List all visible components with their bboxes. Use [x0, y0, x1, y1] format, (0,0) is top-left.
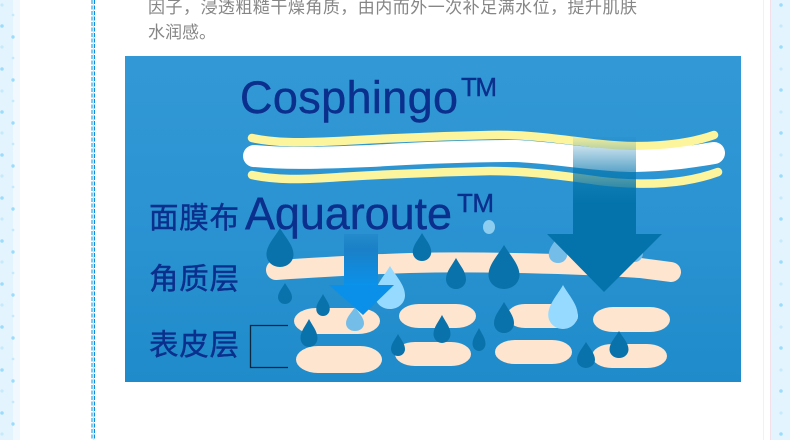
dark water drops [266, 228, 628, 368]
light water drops [375, 266, 578, 329]
skin layer: stratum corneum [276, 262, 671, 272]
label: stratum corneum: 角质层 [149, 263, 239, 296]
heading: mask cloth Aquaroute: TM [457, 188, 494, 218]
skin cells [294, 304, 670, 373]
white sheet layer [254, 151, 714, 161]
heading: mask cloth Aquaroute [149, 188, 494, 239]
body text: 水润感。 [148, 23, 216, 42]
heading: mask cloth Aquaroute: 面膜布 [149, 202, 239, 235]
left decorative border strip [0, 0, 20, 440]
panel: diagram background [125, 56, 741, 382]
heading: mask cloth Aquaroute: Aquaroute [245, 188, 452, 239]
body text [148, 0, 637, 42]
top yellow layer [252, 135, 714, 146]
bracket [250, 326, 288, 368]
heading: Cosphingo: Cosphingo [240, 72, 458, 123]
mask sheet layers [252, 135, 718, 184]
right decorative border strip [763, 0, 790, 440]
medium water drops [346, 220, 643, 331]
label: epidermis: 表皮层 [149, 329, 239, 362]
arrow: large dark blue [547, 137, 662, 292]
dashed vertical double rule [92, 0, 94, 440]
bottom yellow layer [252, 171, 718, 184]
arrow: small bright blue [329, 234, 394, 315]
heading: Cosphingo: TM [461, 72, 497, 102]
